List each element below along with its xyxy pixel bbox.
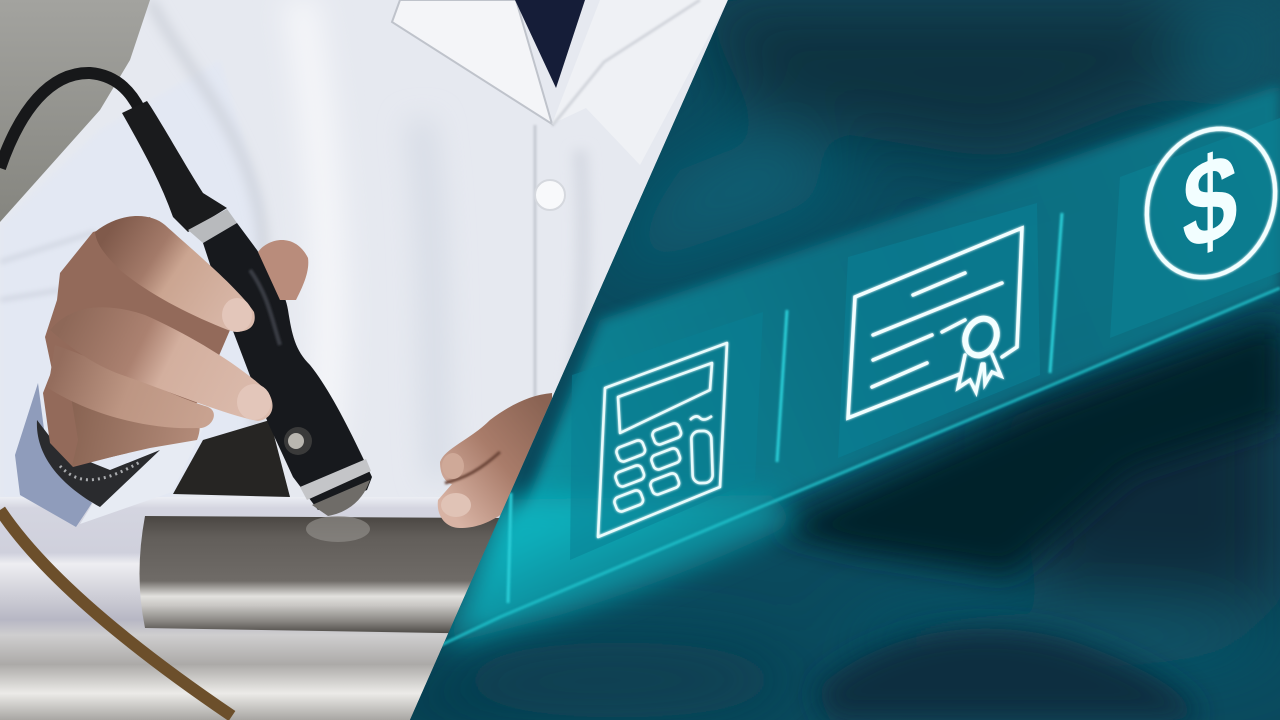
- metal pipe: [140, 516, 500, 634]
- lab coat: [0, 0, 728, 520]
- right hand: [438, 393, 552, 528]
- coat button: [535, 180, 565, 210]
- right panel: teal digital background: [320, 0, 1280, 720]
- dark forearm below band: [770, 320, 1280, 575]
- right lapel: [552, 0, 728, 165]
- tile: dollar: [1110, 118, 1280, 338]
- table: [0, 497, 520, 720]
- icon: certificate: [848, 228, 1022, 418]
- tile: calculator: [570, 372, 703, 560]
- ultrasonic probe: [122, 101, 372, 516]
- icon: calculator: [598, 343, 727, 537]
- dark blurred shapes: [320, 0, 1280, 720]
- tile: certificate: [838, 203, 1040, 458]
- shirt sleeve under wrist: [80, 502, 142, 524]
- icon: dollar: $: [1182, 125, 1238, 279]
- dark gap under arm: [173, 420, 290, 497]
- sleeve cuff: [15, 383, 92, 527]
- icon: dollar: [1142, 124, 1280, 282]
- background wall: [0, 0, 150, 222]
- dark hand bottom right: [815, 628, 1200, 720]
- left photo: technician with ultrasonic probe: [0, 0, 728, 720]
- band bright lower edge: [437, 288, 1280, 647]
- probe cable: [0, 73, 140, 168]
- fingernails: [222, 298, 252, 332]
- glowing dividers: [508, 213, 1062, 603]
- left lapel: [392, 0, 552, 124]
- watch band: [37, 420, 160, 507]
- brown cable: [0, 510, 232, 716]
- blurred upper band glow: [522, 84, 1280, 516]
- tie: [515, 0, 585, 88]
- left hand: [43, 216, 308, 467]
- teal backdrop: [410, 0, 1280, 720]
- low glow under band: [445, 495, 800, 645]
